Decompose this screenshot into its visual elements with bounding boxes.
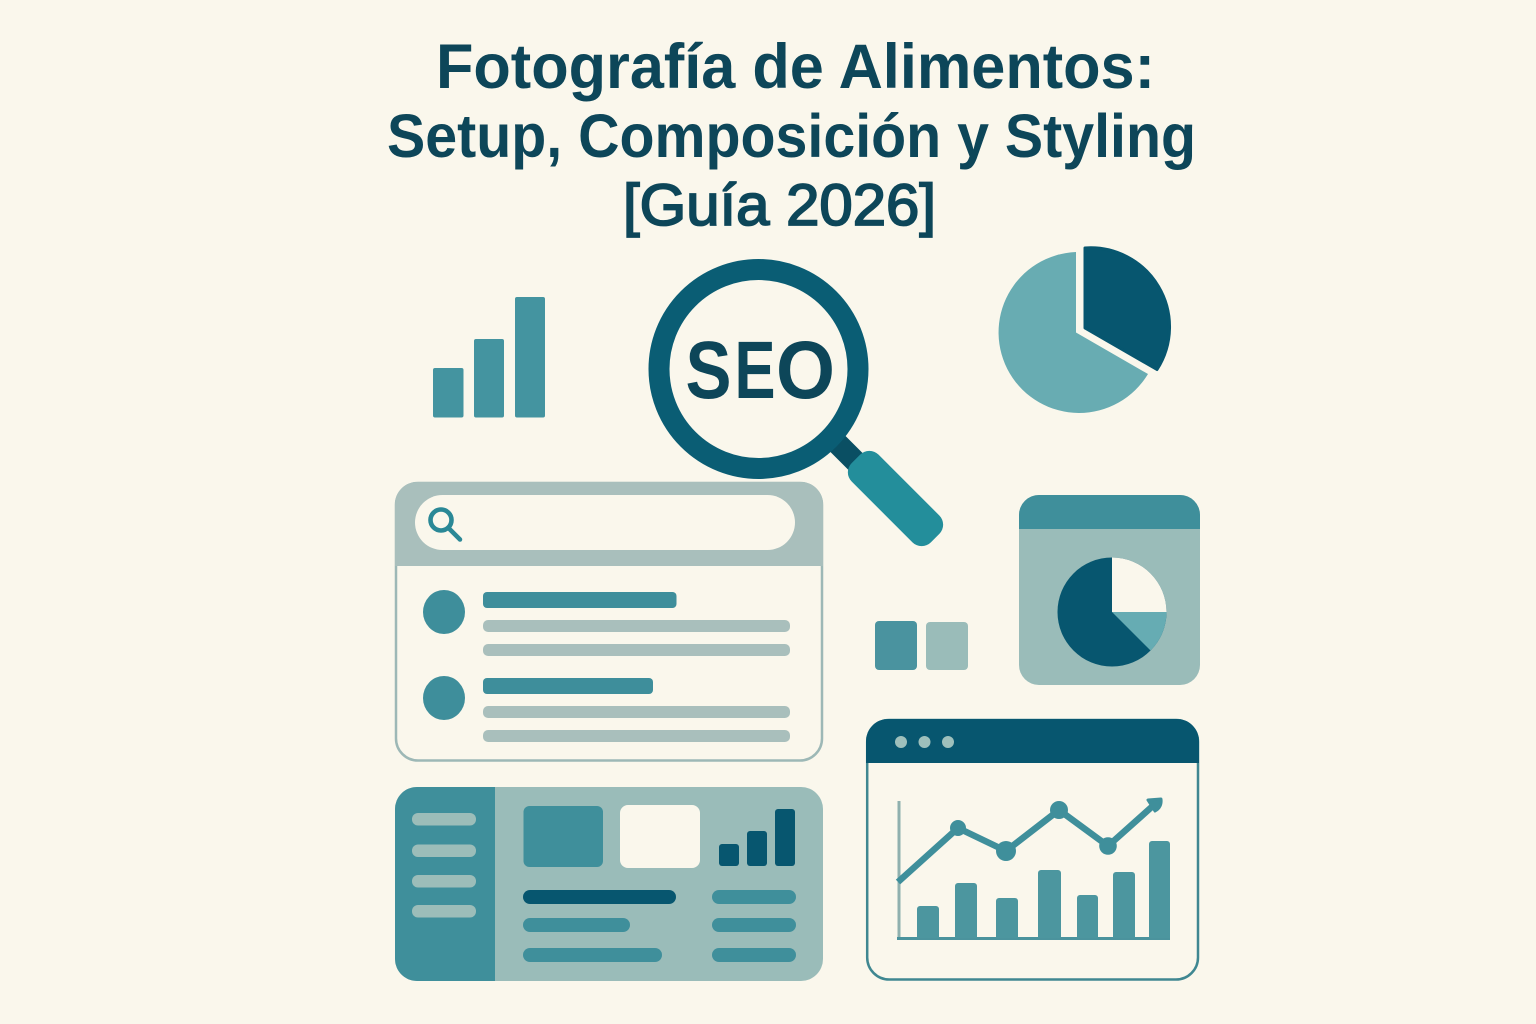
small squares [875, 621, 968, 670]
chart bars [917, 841, 1170, 938]
dashboard white tile [620, 805, 700, 868]
dashboard teal tile [524, 806, 603, 867]
search panel header [395, 482, 823, 566]
title: Setup, Composición y Styling [387, 102, 1196, 170]
magnifier handle [842, 445, 949, 552]
icon: magnifying glass with SEO [659, 270, 949, 552]
title [387, 32, 1196, 238]
window dots [895, 736, 954, 748]
SEO label: O [776, 325, 835, 416]
icon: small magnifier [430, 510, 460, 540]
pie chart in card [1058, 558, 1166, 666]
search result two [423, 676, 790, 742]
SEO label: S [686, 325, 732, 416]
panel: chart window [866, 719, 1199, 980]
dashboard rows [523, 890, 796, 962]
search panel frame [396, 483, 822, 760]
pie card body [1019, 495, 1200, 685]
search bar [415, 495, 795, 550]
chart window frame [867, 720, 1198, 980]
search result one [423, 590, 790, 656]
pie card header [1019, 495, 1200, 529]
magnifier neck [836, 442, 860, 466]
SEO label [686, 325, 835, 416]
panel: pie card [1019, 495, 1200, 685]
dashboard main [395, 787, 823, 981]
title: Fotografía de Alimentos: [436, 32, 1155, 102]
icon: pie chart [999, 248, 1170, 413]
dashboard sidebar [395, 787, 495, 981]
trend line [898, 799, 1161, 882]
dashboard mini bars [719, 809, 795, 866]
title: [Guía 2026] [623, 173, 936, 238]
chart window title bar [866, 719, 1199, 763]
magnifier ring [659, 270, 858, 468]
panel: search results [395, 482, 823, 760]
chart axes [897, 801, 1170, 940]
icon: bar chart [433, 297, 545, 418]
SEO label: E [734, 325, 776, 416]
panel: dashboard [395, 787, 823, 981]
sidebar items [412, 813, 476, 918]
